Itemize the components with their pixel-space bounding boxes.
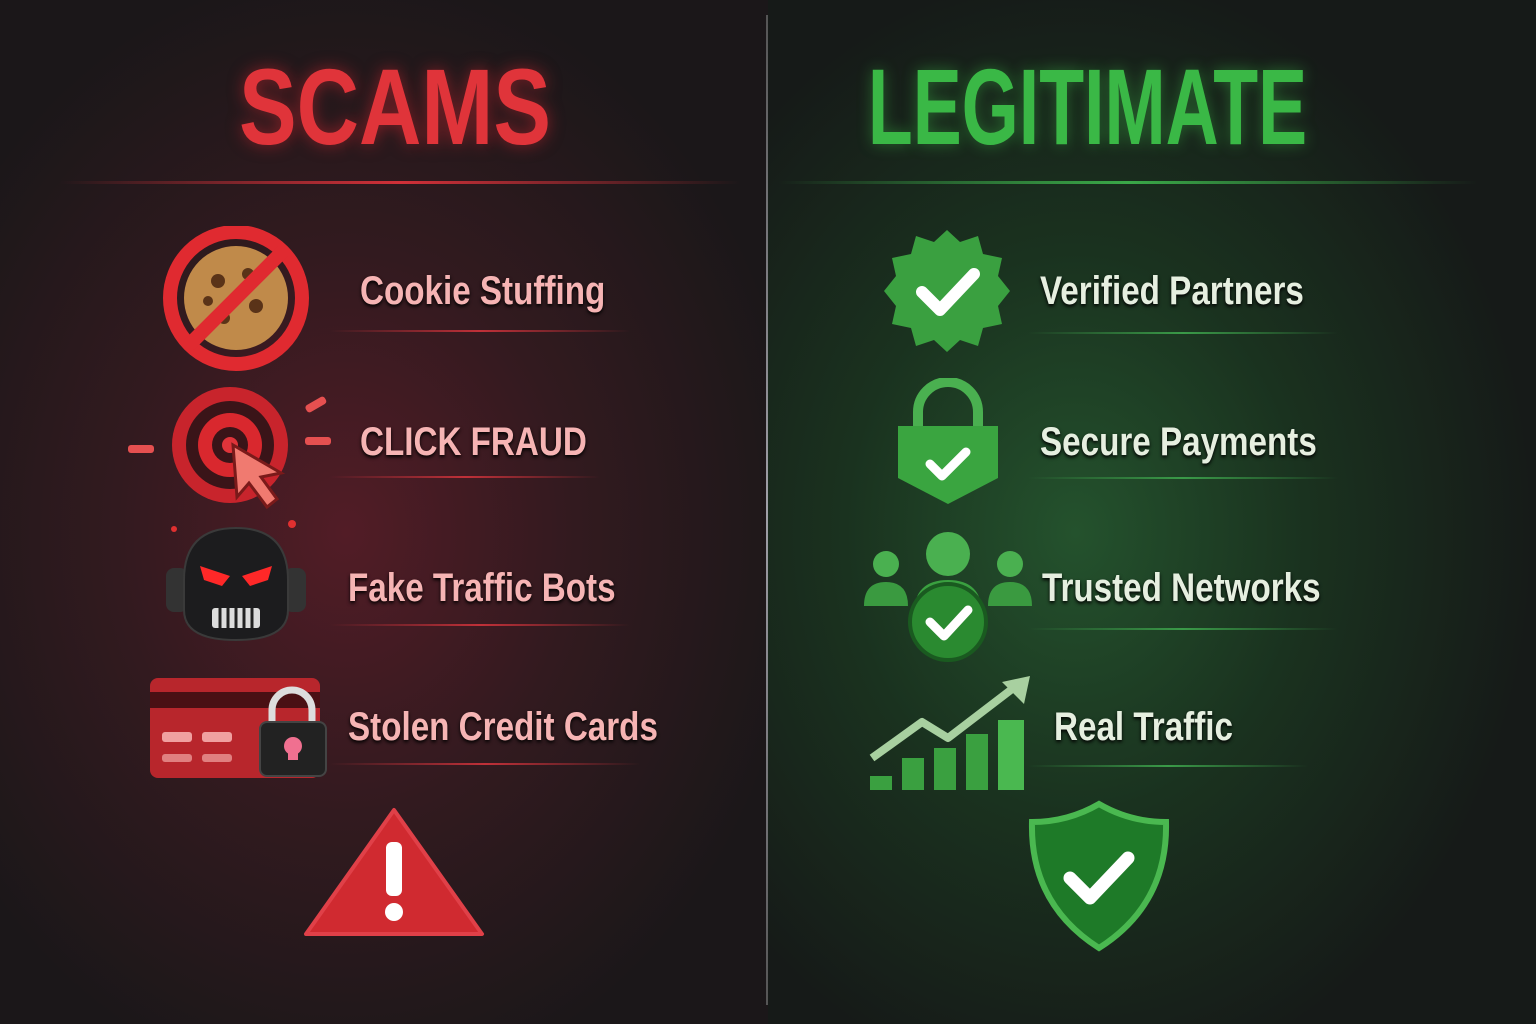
icon: bot (166, 520, 306, 641)
panel: legitimate (768, 0, 1536, 1024)
text: secure payments: Secure Payments (1040, 420, 1317, 464)
divider (766, 15, 770, 1005)
icon: verified badge (884, 230, 1010, 352)
text: trusted networks: Trusted Networks (1042, 566, 1321, 610)
icon: padlock (898, 378, 998, 504)
icon: credit card lock (150, 678, 327, 778)
title: legitimate: LEGITIMATE (868, 46, 1307, 167)
text: real traffic: Real Traffic (1054, 705, 1233, 749)
icon: warning (304, 808, 484, 936)
icon: growth chart (870, 676, 1030, 790)
text: verified partners: Verified Partners (1040, 269, 1304, 313)
title: scams: SCAMS (239, 46, 551, 167)
icon: target click (128, 387, 331, 509)
icon: no cookie (163, 226, 309, 371)
icon: shield (1028, 800, 1170, 952)
text: fake traffic bots: Fake Traffic Bots (348, 566, 616, 610)
text: cookie stuffing: Cookie Stuffing (360, 269, 605, 313)
icon: trusted network (864, 532, 1032, 662)
panel: scams (0, 0, 768, 1024)
text: stolen credit cards: Stolen Credit Cards (348, 705, 658, 749)
text: click fraud: CLICK FRAUD (360, 420, 587, 464)
